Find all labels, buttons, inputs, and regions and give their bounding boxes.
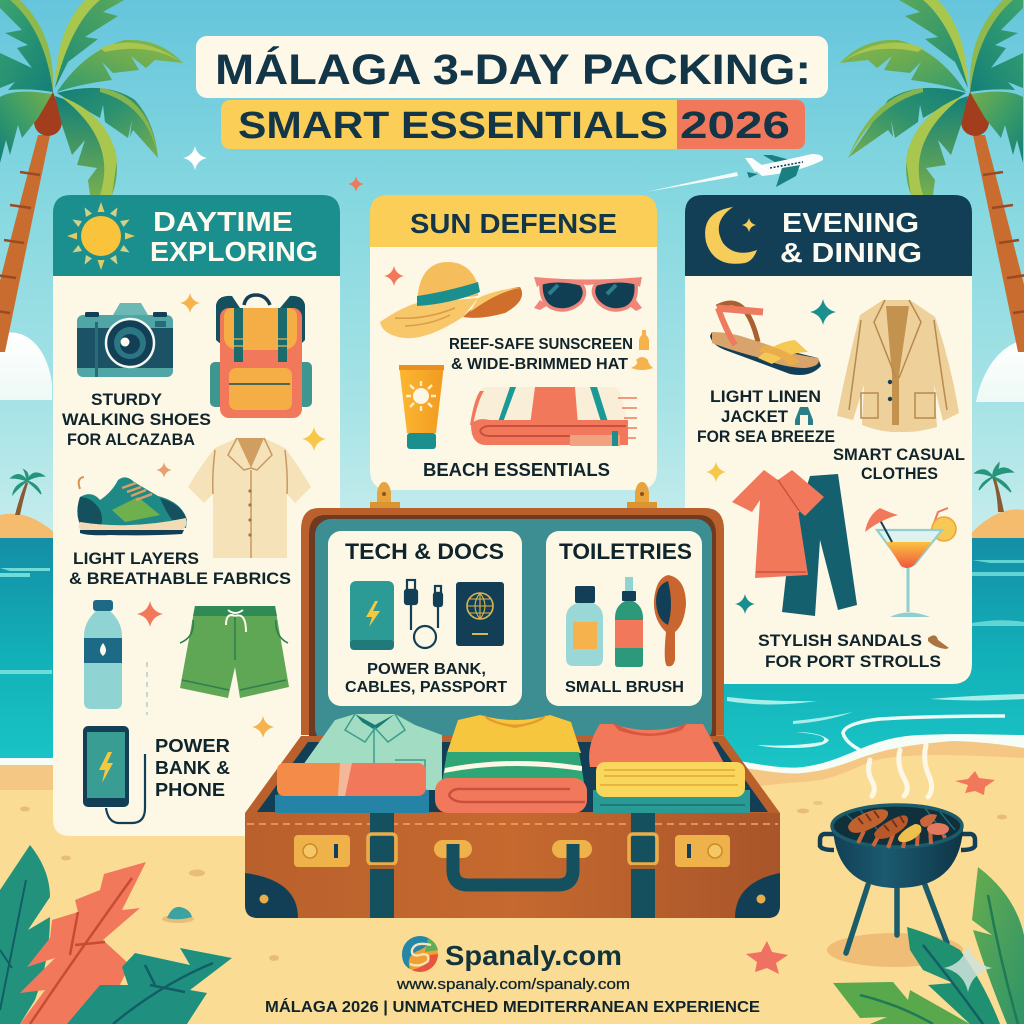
- sparkle in header: [742, 218, 756, 232]
- panel body: [53, 260, 340, 836]
- grill grate: [832, 805, 962, 848]
- icon: tiny hat: [631, 357, 653, 370]
- airplane with trail: [646, 154, 823, 192]
- icon: sunglasses: [534, 277, 642, 311]
- decorative sparkles in sky: [183, 146, 364, 192]
- text: sturdy walking shoes: WALKING SHOES: [62, 410, 211, 429]
- text: reef-safe sunscreen and hat: [449, 336, 633, 373]
- text: stylish sandals for port strolls: [758, 631, 941, 671]
- ground shadow: [827, 933, 963, 967]
- folded clothes: right stack: [589, 722, 750, 813]
- icon: camera: [77, 303, 173, 377]
- icon: backpack: [210, 295, 312, 418]
- panel heading: [780, 207, 922, 268]
- logo: [402, 936, 438, 972]
- small palm right: [975, 463, 1013, 512]
- icon: cocktail: [865, 508, 956, 617]
- text: power bank and phone: [155, 736, 230, 800]
- panel: evening and dining: [685, 195, 972, 684]
- text: light layers and breathable fabrics: LIGHT LAYERS: [73, 549, 199, 568]
- title block: [196, 36, 828, 149]
- icon: sun: [67, 202, 135, 270]
- icon: spray bottle: [615, 577, 643, 667]
- icon: passport: [456, 582, 504, 646]
- panel: daytime exploring: [53, 195, 340, 836]
- grill legs: [846, 885, 947, 953]
- card: tech and docs: POWER BANK,: [367, 661, 486, 678]
- suitcase lid: [301, 508, 724, 744]
- icon: bottle: [566, 586, 603, 666]
- text: power bank and phone: POWER: [155, 736, 230, 756]
- card: toiletries: TOILETRIES: [559, 539, 692, 564]
- icon: linen jacket: [837, 300, 959, 432]
- left palm tree: [0, 0, 183, 352]
- icon: cable: [405, 580, 442, 648]
- icon: tiny bottle: [639, 330, 649, 350]
- tropical leaves bottom right: [833, 867, 1024, 1024]
- card: tech and docs: TECH & DOCS: [345, 539, 504, 564]
- sparkles: [137, 293, 326, 738]
- panel: sun defense: [370, 195, 657, 490]
- tagline: MÁLAGA 2026 | UNMATCHED MEDITERRANEAN EXPERIENCE: [265, 997, 760, 1016]
- text: smart casual clothes: [833, 445, 965, 483]
- text: power bank and phone: PHONE: [155, 780, 225, 800]
- title line 1: [196, 36, 828, 98]
- text: light linen jacket: JACKET: [721, 407, 789, 426]
- icon: crescent moon: [705, 207, 757, 264]
- text: sturdy walking shoes: STURDY: [91, 390, 163, 409]
- suitcase front: [245, 813, 780, 918]
- grill bowl: [833, 830, 963, 888]
- small palm left: [11, 470, 44, 515]
- handle: [434, 840, 592, 885]
- text: light linen jacket: LIGHT LINEN: [710, 387, 821, 406]
- icon: sunscreen tube: [399, 365, 444, 449]
- card: tech and docs: CABLES, PASSPORT: [345, 679, 507, 696]
- grill with smoke: [820, 745, 975, 967]
- lid hinges: [370, 482, 657, 508]
- text: reef-safe sunscreen and hat: REEF-SAFE SUNSCREEN: [449, 336, 633, 353]
- panel heading: DAYTIME: [153, 206, 293, 237]
- suitcase base: [245, 736, 780, 918]
- straps and buckles: [368, 813, 657, 918]
- text: sturdy walking shoes: FOR ALCAZABA: [67, 430, 195, 449]
- text: light linen jacket: FOR SEA BREEZE: [697, 427, 835, 446]
- title line 2: 2026: [680, 105, 790, 147]
- panel header: [685, 195, 972, 276]
- corner protectors: [245, 873, 780, 918]
- icon: shirt and trousers: [732, 470, 857, 616]
- tropical leaves bottom left: [0, 845, 232, 1024]
- panel heading: [150, 206, 318, 267]
- text: light layers and breathable fabrics: [69, 549, 291, 588]
- smoke: [869, 745, 932, 797]
- text: reef-safe sunscreen and hat: & WIDE-BRIMMED HAT: [451, 356, 628, 373]
- text: light linen jacket: [697, 387, 835, 446]
- footer: brand: [265, 936, 760, 1016]
- panel heading: EXPLORING: [150, 236, 318, 267]
- sparkle: [384, 266, 404, 286]
- text: beach essentials: BEACH ESSENTIALS: [423, 460, 610, 480]
- text: power bank and phone: BANK &: [155, 758, 230, 778]
- text: stylish sandals for port strolls: FOR PORT STROLLS: [765, 652, 941, 671]
- text: light layers and breathable fabrics: & BREATHABLE FABRICS: [69, 569, 291, 588]
- panel header: [53, 195, 340, 276]
- folded clothes: middle stack: [435, 715, 587, 813]
- panel body: [370, 240, 657, 490]
- icon: power bank: [350, 581, 394, 650]
- icon: beach towel: [470, 387, 637, 446]
- icon: sun hat: [380, 262, 522, 338]
- text: smart casual clothes: SMART CASUAL: [833, 445, 965, 464]
- clasps: [294, 835, 730, 867]
- icon: tiny sandal: [928, 635, 949, 649]
- grilled food: [848, 809, 949, 842]
- open suitcase: [245, 482, 780, 918]
- icon: walking shoe: [77, 477, 187, 535]
- card: toiletries: SMALL BRUSH: [565, 679, 684, 696]
- starfish right: [955, 771, 995, 795]
- pebble: [162, 907, 194, 923]
- icon: short sleeve shirt: [188, 438, 311, 558]
- URL: www.spanaly.com/spanaly.com: [396, 976, 630, 993]
- icon: sandal: [710, 303, 821, 375]
- card: toiletries: [546, 531, 702, 706]
- grill handles: [820, 834, 975, 850]
- icon: phone with cable: [83, 662, 147, 823]
- title line 2: SMART ESSENTIALS: [238, 105, 668, 147]
- title line 1: MÁLAGA 3-DAY PACKING:: [215, 46, 811, 94]
- brand name: Spanaly.com: [445, 940, 622, 971]
- panel header: [370, 195, 657, 247]
- text: smart casual clothes: CLOTHES: [861, 464, 938, 483]
- panel heading: & DINING: [780, 237, 922, 268]
- card: tech and docs: [328, 531, 522, 706]
- folded clothes: left stack: [275, 714, 442, 813]
- starfish bottom: [746, 941, 788, 974]
- right palm tree: [840, 0, 1024, 352]
- sparkles: [706, 299, 836, 614]
- panel heading: SUN DEFENSE: [410, 208, 617, 239]
- icon: green shorts: [180, 606, 289, 698]
- icon: tiny jacket: [795, 407, 813, 425]
- icon: hair brush: [654, 575, 686, 666]
- title line 2: [221, 100, 805, 149]
- text: sturdy walking shoes: [62, 390, 211, 449]
- panel heading: EVENING: [782, 207, 919, 238]
- icon: water bottle: [84, 600, 122, 709]
- text: stylish sandals for port strolls: STYLISH SANDALS: [758, 631, 922, 650]
- panel body: [685, 260, 972, 684]
